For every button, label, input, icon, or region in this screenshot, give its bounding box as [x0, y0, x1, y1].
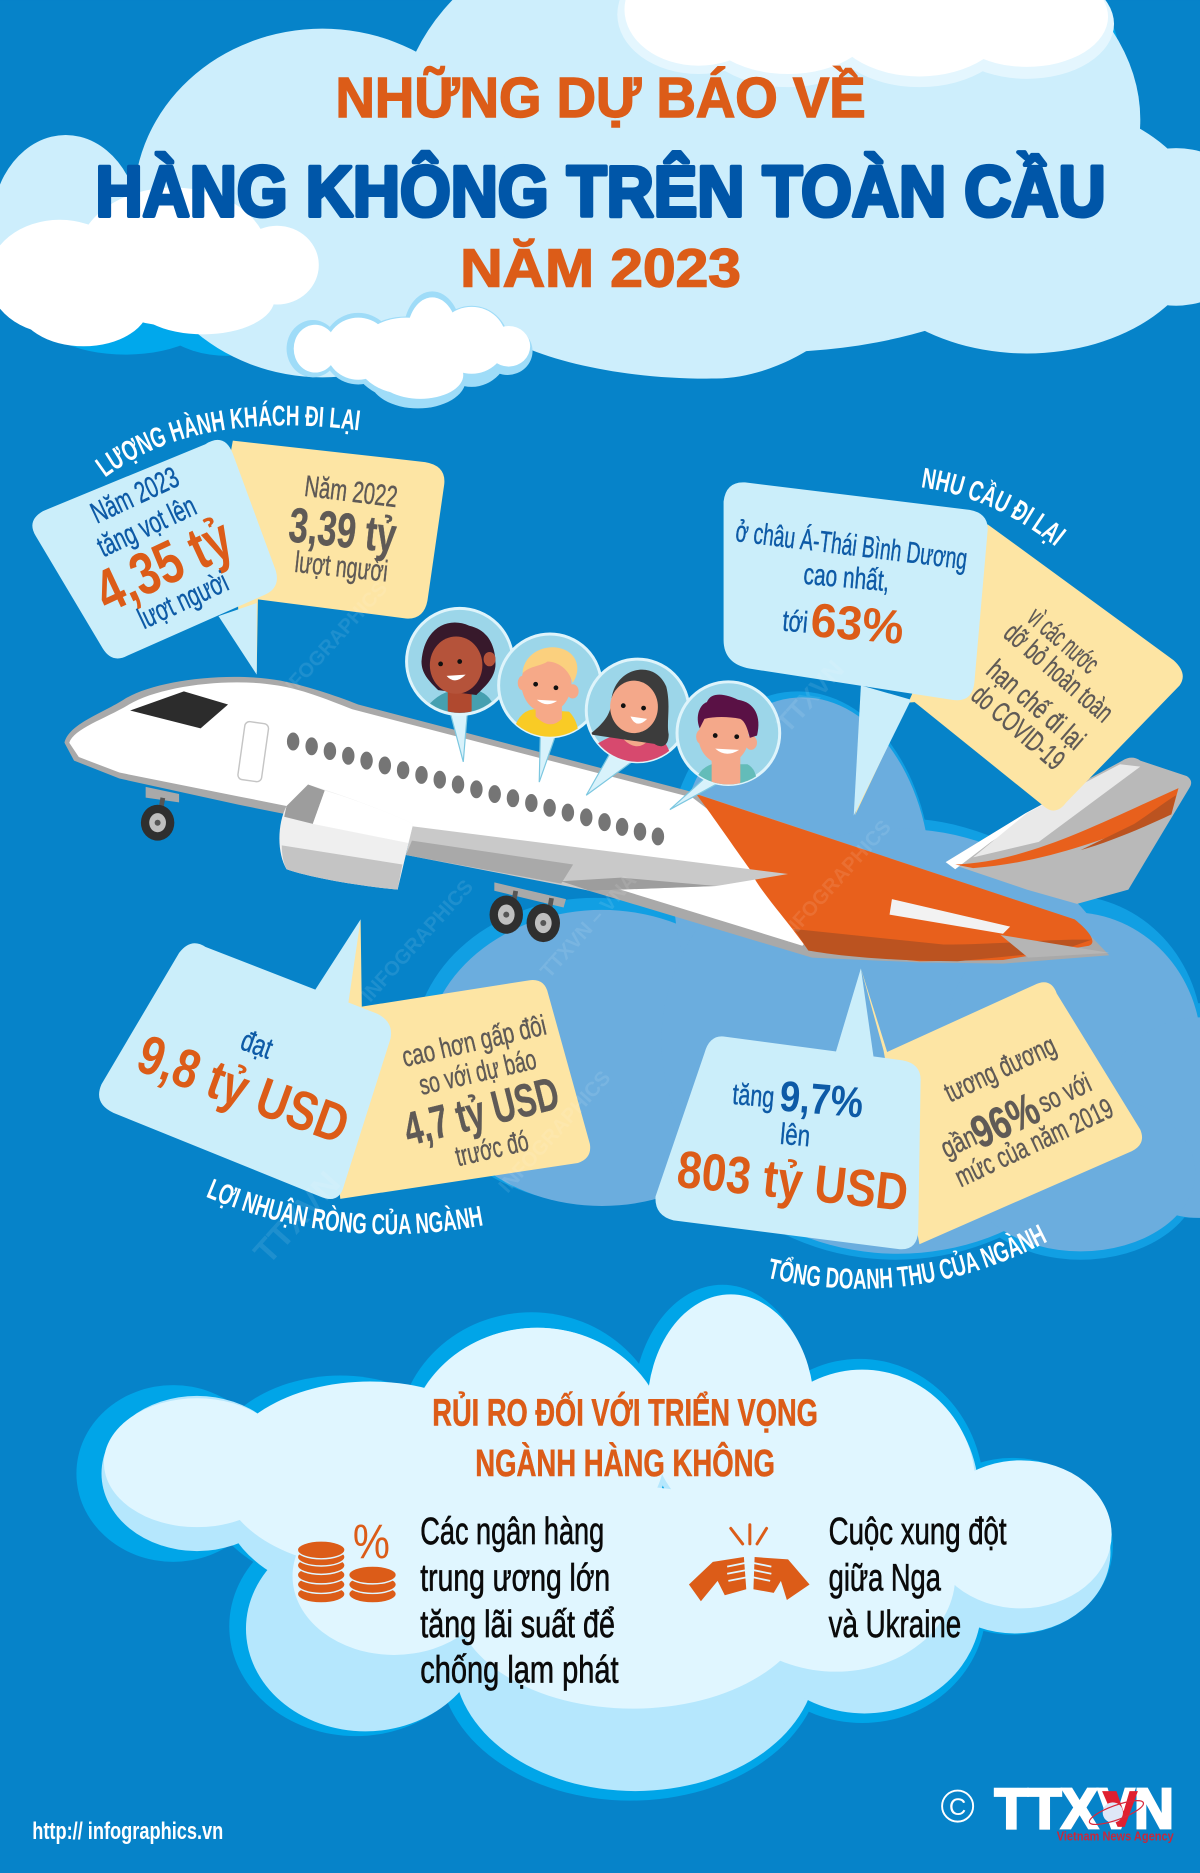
- text: 2023 figures: lượt người: [133, 565, 233, 636]
- windows: [287, 733, 664, 845]
- text: 2023 figures: [84, 461, 243, 636]
- cockpit window: [130, 691, 228, 728]
- text: revenue: [674, 1072, 911, 1223]
- main landing gear: [490, 882, 566, 942]
- title line 1: NHỮNG DỰ BÁO VỀ: [336, 66, 866, 129]
- text: comparison: so với: [1033, 1067, 1096, 1119]
- text: Asia-Pacific: 63%: [809, 594, 906, 655]
- white panel on tail: [890, 899, 1010, 934]
- front landing gear: [141, 787, 179, 841]
- text: comparison: trước đó: [452, 1125, 532, 1173]
- label: passenger volume: LƯỢNG HÀNH KHÁCH ĐI LẠI: [94, 400, 360, 477]
- blue bubble revenue: [655, 968, 921, 1249]
- dark orange underside: [794, 929, 1091, 961]
- text: comparison: cao hơn gấp đôi: [399, 1010, 549, 1074]
- text: central banks: Các ngân hàng: [420, 1510, 604, 1553]
- yellow bubble comparison: [861, 968, 1142, 1244]
- text: central banks: tăng lãi suất để: [420, 1603, 615, 1646]
- blue bubble Asia-Pacific: [724, 482, 988, 816]
- copyright icon: [942, 1791, 973, 1822]
- text: revenue: lên: [779, 1118, 812, 1153]
- text: profit: 9,8 tỷ USD: [130, 1022, 357, 1156]
- logo: TTXVN: TTXVN: [995, 1777, 1174, 1840]
- orange tail section: [696, 794, 1092, 961]
- watermarks: INFOGRAPHICS: [775, 816, 896, 947]
- text: comparison: [399, 1010, 564, 1173]
- text: central banks: trung ương lớn: [420, 1556, 610, 1599]
- door: [237, 721, 269, 782]
- fuselage: [64, 677, 1109, 964]
- text: central banks: [420, 1510, 619, 1691]
- blue bubble profit: [99, 919, 391, 1199]
- logo: TTXVN: Vietnam News Agency: [1057, 1829, 1174, 1844]
- watermarks: TTXVN – VNA: [537, 870, 641, 982]
- icon: coins and percent: [297, 1516, 396, 1603]
- title line 3: NĂM 2023: [460, 239, 741, 299]
- title line 2: HÀNG KHÔNG TRÊN TOÀN CẦU: [96, 151, 1106, 232]
- yellow bubble 2022: [230, 441, 444, 672]
- text: Asia-Pacific: ở châu Á-Thái Bình Dương: [734, 515, 969, 576]
- text: revenue: 9,7%: [778, 1072, 865, 1128]
- label: travel demand: NHU CẦU ĐI LẠI: [922, 468, 1067, 546]
- blue bubble 2023: [32, 440, 277, 675]
- icon: clashing fists: [689, 1525, 810, 1601]
- panel: passenger volume: [32, 400, 444, 674]
- text: comparison: 96%: [963, 1083, 1047, 1158]
- text: comparison: gần: [936, 1121, 982, 1165]
- label: total revenue: TỔNG DOANH THU CỦA NGÀNH: [770, 1224, 1047, 1289]
- cloud: behind plane: [413, 691, 1200, 1260]
- heading: risks: NGÀNH HÀNG KHÔNG: [475, 1440, 775, 1485]
- text: revenue: 803 tỷ USD: [674, 1140, 911, 1223]
- text: comparison: tương đương: [939, 1030, 1061, 1109]
- text: central banks: chống lạm phát: [420, 1648, 619, 1691]
- text: reason: do COVID-19: [965, 679, 1071, 777]
- text: Russia-Ukraine conflict: giữa Nga: [829, 1556, 941, 1599]
- watermarks: TTXVN: [247, 1165, 348, 1271]
- text: comparison: mức của năm 2019: [950, 1093, 1118, 1194]
- text: Russia-Ukraine conflict: Cuộc xung đột: [829, 1510, 1007, 1553]
- text: 2022 figures: 3,39 tỷ: [286, 498, 399, 563]
- gray tail tip: [1001, 935, 1109, 958]
- watermarks: INFOGRAPHICS: [358, 876, 478, 1006]
- text: comparison: [932, 1030, 1118, 1194]
- avatar: passenger 2: [499, 634, 601, 782]
- copyright icon: C: [949, 1794, 966, 1821]
- cloud: white left: [0, 187, 319, 346]
- white body: [69, 682, 836, 946]
- text: Asia-Pacific: cao nhất,: [802, 558, 891, 598]
- heading: risks: [432, 1390, 818, 1485]
- airplane: [64, 677, 1191, 964]
- cloud: risks panel: [76, 1285, 1113, 1801]
- text: 2022 figures: lượt người: [293, 546, 389, 589]
- avatar: passenger 1: [407, 608, 513, 762]
- watermarks: INFOGRAPHICS: [272, 578, 392, 708]
- footer url: http:// infographics.vn: [32, 1818, 223, 1845]
- text: 2023 figures: Năm 2023: [86, 461, 184, 530]
- engine: [279, 784, 413, 890]
- yellow bubble reason: [855, 524, 1183, 816]
- avatar: passenger 4: [670, 682, 780, 810]
- text: reason: hạn chế đi lại: [980, 654, 1091, 756]
- text: comparison: so với dự báo: [416, 1044, 540, 1102]
- label: net profit: LỢI NHUẬN RÒNG CỦA NGÀNH: [206, 1178, 483, 1234]
- panel: travel demand: [724, 468, 1183, 816]
- watermarks: INFOGRAPHICS: [495, 1067, 615, 1197]
- text: 2023 figures: tăng vọt lên: [92, 489, 201, 564]
- text: reason: vì các nước: [1021, 601, 1105, 680]
- text: profit: đạt: [236, 1024, 277, 1066]
- avatar: passenger 3: [586, 659, 689, 795]
- text: reason: [965, 601, 1119, 777]
- text: Asia-Pacific: [734, 515, 969, 655]
- watermarks: TTXVN: [770, 654, 850, 738]
- text: Asia-Pacific: tới: [781, 605, 809, 640]
- wing: [406, 826, 788, 891]
- cloud: white top right: [617, 0, 1114, 87]
- text: 2022 figures: Năm 2022: [303, 470, 399, 514]
- tail fin: [946, 758, 1191, 904]
- text: Russia-Ukraine conflict: [829, 1510, 1007, 1646]
- panel: net profit: [99, 920, 590, 1234]
- panel: total revenue: [656, 968, 1142, 1289]
- cloud: small white: [287, 291, 533, 408]
- text: revenue: tăng: [731, 1078, 776, 1114]
- text: comparison: 4,7 tỷ USD: [399, 1067, 564, 1155]
- icon: coins and percent: %: [353, 1516, 390, 1569]
- cloud: top header: [0, 0, 1200, 379]
- text: Russia-Ukraine conflict: và Ukraine: [829, 1603, 961, 1646]
- text: 2022 figures: [286, 470, 399, 589]
- text: 2023 figures: 4,35 tỷ: [84, 504, 243, 625]
- text: reason: dỡ bỏ hoàn toàn: [997, 617, 1119, 729]
- yellow bubble comparison: [322, 919, 590, 1199]
- watermarks: [247, 578, 896, 1271]
- heading: risks: RỦI RO ĐỐI VỚI TRIỂN VỌNG: [432, 1390, 818, 1435]
